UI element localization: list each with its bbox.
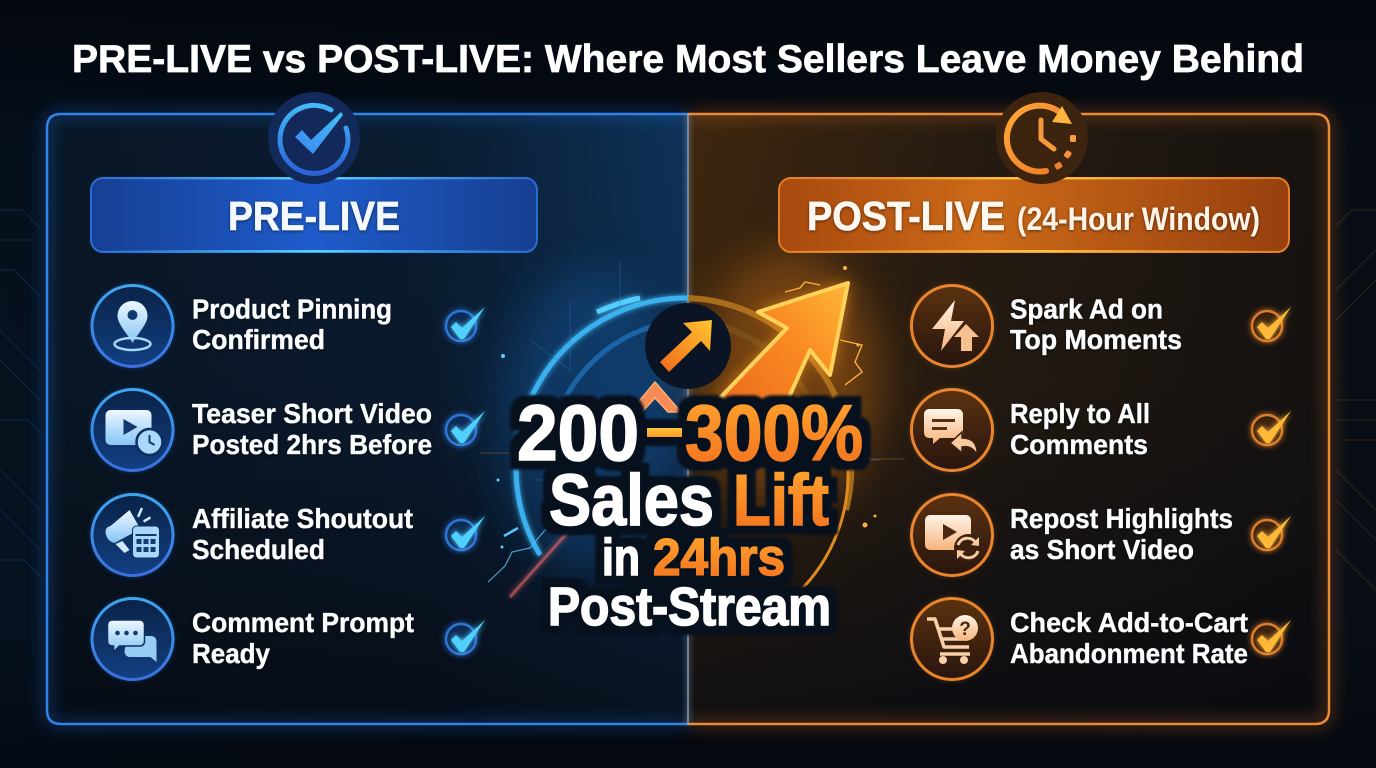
label: Abandonment Rate <box>1010 638 1248 669</box>
item row: spark ad <box>911 285 1291 367</box>
panel: pre-live background <box>47 114 688 724</box>
item row: repost highlights <box>911 494 1291 576</box>
central statistic callout: Lift <box>733 461 829 541</box>
icon: reply bubble <box>911 389 993 471</box>
label: Spark Ad on <box>1010 294 1163 324</box>
icon: center arrow badge <box>645 303 731 389</box>
central statistic callout: 24hrs <box>653 529 785 587</box>
icon: check <box>446 516 485 550</box>
label: Posted 2hrs Before <box>192 429 432 460</box>
icon: pre-live check badge <box>268 92 360 184</box>
label: Affiliate Shoutout <box>192 503 413 534</box>
label <box>192 398 432 460</box>
central statistic callout: Sales <box>549 461 714 541</box>
item row: add-to-cart check <box>911 598 1291 680</box>
label: Reply to All <box>1010 398 1150 429</box>
circuit pattern: right margin <box>1336 210 1376 590</box>
icon: cart with question mark: ? <box>959 619 971 640</box>
label: Scheduled <box>192 534 325 565</box>
panel border: post-live <box>688 114 1329 724</box>
label <box>1010 398 1150 460</box>
item row: comment prompt <box>92 598 485 680</box>
label: Comments <box>1010 429 1148 460</box>
label: Confirmed <box>192 324 325 355</box>
central statistic callout: in <box>602 529 640 587</box>
lightning and light streaks <box>488 266 876 597</box>
icon: check <box>1252 307 1291 341</box>
title: PRE-LIVE vs POST-LIVE: Where Most Sellers Leave Money Behind <box>72 38 1304 81</box>
label <box>192 607 414 669</box>
icon: small chevron behind figure <box>630 382 681 412</box>
icon: megaphone with calendar <box>92 494 174 576</box>
icon: check <box>446 620 485 654</box>
icon: check <box>1252 411 1291 445</box>
icon: check <box>446 307 485 341</box>
label: Ready <box>192 638 270 669</box>
item row: reply to comments <box>911 389 1291 471</box>
label: Teaser Short Video <box>192 398 432 429</box>
icon: check <box>446 411 485 445</box>
icon: big rising arrow <box>720 283 848 440</box>
item row: product pinning <box>92 285 485 367</box>
section header: post-live: (24-Hour Window) <box>1017 201 1260 237</box>
central glow and ring graphic <box>480 250 905 600</box>
icon: video with refresh <box>911 494 993 576</box>
label <box>1010 503 1233 565</box>
label: Comment Prompt <box>192 607 414 638</box>
icon: location pin <box>92 285 174 367</box>
panel border: pre-live <box>47 114 688 724</box>
item row: teaser video <box>92 389 485 471</box>
icon: post-live clock badge <box>996 92 1088 184</box>
icon: cart with question mark <box>911 598 993 680</box>
section header: post-live: POST-LIVE <box>807 193 1005 239</box>
icon: check <box>1252 516 1291 550</box>
icon: chat bubbles <box>92 598 174 680</box>
label <box>1010 607 1248 669</box>
label: as Short Video <box>1010 534 1194 565</box>
label <box>1010 294 1182 355</box>
label <box>192 503 413 565</box>
central statistic callout <box>517 388 863 637</box>
section header: post-live <box>779 177 1289 252</box>
central statistic callout: Post-Stream <box>548 577 831 637</box>
central statistic callout: 200 <box>517 388 639 477</box>
section header: pre-live: PRE-LIVE <box>228 193 400 239</box>
label: Product Pinning <box>192 294 392 324</box>
central statistic callout: 300% <box>685 388 863 477</box>
label: Check Add-to-Cart <box>1010 607 1248 638</box>
label: Top Moments <box>1010 324 1182 355</box>
icon: video with clock <box>92 389 174 471</box>
icon: check <box>1252 620 1291 654</box>
label: Repost Highlights <box>1010 503 1233 534</box>
panel: post-live background <box>688 114 1329 724</box>
icon: lightning with up arrow <box>911 285 993 367</box>
label <box>192 294 392 355</box>
central divider <box>685 114 691 724</box>
item row: affiliate shoutout <box>92 494 485 576</box>
circuit pattern: left margin <box>0 210 42 578</box>
section header: pre-live <box>91 177 537 252</box>
